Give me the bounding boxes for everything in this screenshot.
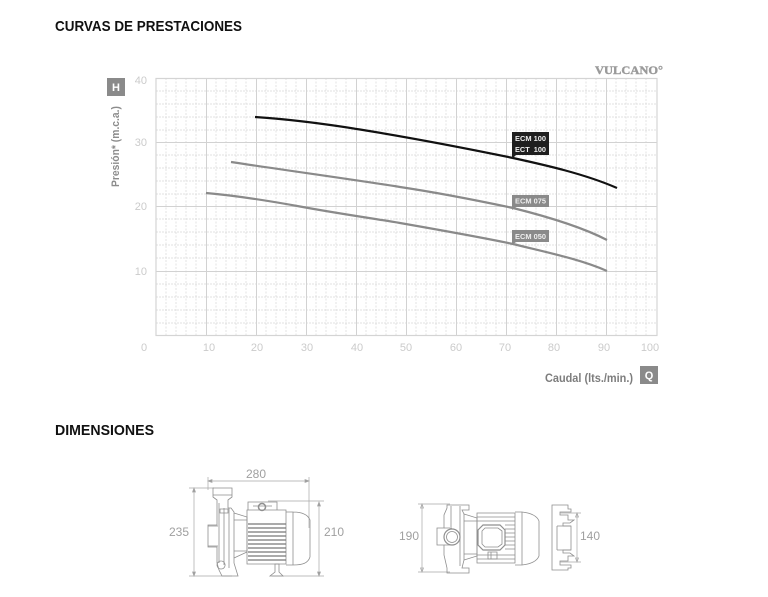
y axis badge H — [107, 78, 125, 96]
label: ECM 050 — [512, 230, 549, 245]
bracket top view — [464, 514, 477, 560]
x axis numbers: 30 — [301, 342, 313, 354]
label: ECM 050: ECM 050 — [515, 232, 546, 241]
side view dimension values — [169, 467, 344, 539]
y axis numbers: 20 — [135, 201, 147, 213]
terminal box — [248, 502, 277, 510]
motor body — [247, 510, 286, 564]
label: ECM 075 — [512, 195, 549, 210]
side view dimension values: 280 — [246, 467, 266, 481]
motor foot — [270, 564, 283, 576]
x axis numbers: 100 — [641, 342, 659, 354]
top view dimension values — [399, 529, 600, 543]
curve: ECM 050 — [206, 193, 607, 271]
side view pump drawing — [189, 477, 324, 576]
side view dimension values: 210 — [324, 525, 344, 539]
dimension line 140 — [560, 513, 581, 562]
y axis numbers: 40 — [135, 75, 147, 87]
chart grid — [156, 78, 657, 336]
title: curvas de prestaciones: CURVAS DE PRESTACIONES — [55, 18, 242, 35]
side view dimension values: 235 — [169, 525, 189, 539]
motor top view — [477, 513, 515, 563]
motor bracket — [234, 513, 247, 558]
brand logo: vulcano: VULCANO° — [595, 63, 663, 77]
curve: ECM 100 / ECT 100 — [255, 117, 617, 188]
x axis numbers — [141, 342, 659, 354]
x axis numbers: 50 — [400, 342, 412, 354]
label: ECM 100 / ECT 100: ECM 100 — [515, 134, 546, 143]
x axis numbers: 10 — [203, 342, 215, 354]
curve: ECM 075 — [231, 162, 607, 240]
x axis numbers: 40 — [351, 342, 363, 354]
x axis title: Caudal (lts./min.) — [545, 373, 633, 385]
y axis numbers: 10 — [135, 266, 147, 278]
performance chart — [107, 75, 659, 385]
y axis numbers — [135, 75, 147, 278]
heading: dimensiones: DIMENSIONES — [55, 422, 154, 439]
label: ECM 100 / ECT 100 — [512, 132, 549, 159]
volute top view — [437, 505, 469, 573]
x axis numbers: 80 — [548, 342, 560, 354]
mounting foot plate — [552, 505, 574, 570]
fan cover top view — [515, 512, 539, 565]
x axis numbers: 70 — [499, 342, 511, 354]
x axis numbers: 0 — [141, 342, 147, 354]
x axis badge Q: Q — [645, 370, 654, 382]
label: ECM 100 / ECT 100: ECT 100 — [515, 145, 546, 154]
x axis numbers: 90 — [598, 342, 610, 354]
label: ECM 075: ECM 075 — [515, 196, 546, 206]
dimension lines side view — [189, 477, 324, 576]
y axis numbers: 30 — [135, 137, 147, 149]
motor fan cover — [286, 512, 310, 565]
top view pump drawing — [418, 504, 581, 573]
x axis badge Q — [640, 366, 658, 384]
y axis badge H: H — [112, 82, 120, 94]
x axis numbers: 20 — [251, 342, 263, 354]
x axis numbers: 60 — [450, 342, 462, 354]
pump volute and inlet — [208, 488, 238, 576]
y axis title: Presión* (m.c.a.) — [110, 106, 122, 187]
dimension line 190 — [418, 504, 450, 572]
top view dimension values: 190 — [399, 529, 419, 543]
top view dimension values: 140 — [580, 529, 600, 543]
